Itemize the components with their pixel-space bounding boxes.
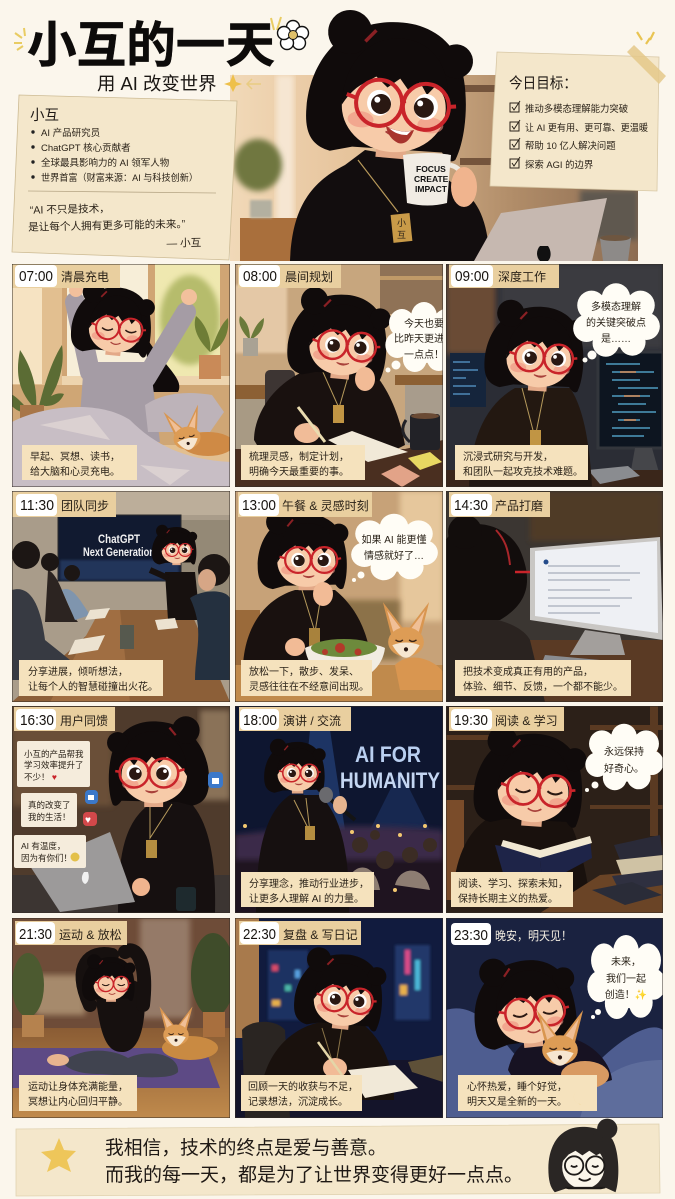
thought bubble [385,302,442,372]
feedback bubble 1: 小互的产品帮我 [24,749,84,759]
panel: 13:00 [235,491,443,702]
time label: 产品打磨 [495,499,543,513]
sketch portrait [548,1119,618,1192]
city lights [268,945,430,1020]
chair [265,370,295,404]
title: 小互的一天 [27,19,275,73]
feedback bubble 3 [14,835,86,868]
feedback bubble 2 [21,793,77,827]
feedback bubble 1: 不少！ ♥ [24,772,57,782]
caption: 分享理念，推动行业进步， [249,877,369,890]
icon: sparkle [224,74,261,92]
profile bullets [31,127,198,184]
panel: 19:30 [446,706,664,913]
table [235,665,443,702]
keyboard [588,466,640,484]
name badge: 互 [397,230,406,240]
caption: 明确今天最重要的事。 [249,465,349,478]
profile quote: 是让每个人拥有更多可能的未来。” [28,217,186,234]
thought bubble: 是…… [601,333,631,345]
monitor [530,537,663,655]
feedback bubble 3: 因为有你们！ [21,853,72,863]
caption [22,445,137,480]
book stack [592,835,663,905]
chair [242,1022,290,1118]
thought bubble [573,283,660,362]
time label: 07:00 [19,268,53,285]
books [408,1055,443,1082]
name badge: 小 [397,218,406,228]
time label [449,707,564,731]
fox cuddled [537,1010,609,1089]
bedding [446,1008,663,1118]
screen: ChatGPT [98,532,141,546]
character [468,950,612,1090]
time label [451,923,572,945]
hero illustration [230,7,638,261]
crowd [235,824,443,913]
character yoga [47,950,178,1077]
name badge [391,213,412,243]
coffee mug: FOCUS [416,164,446,174]
caption: 阅读、学习、探索未知， [458,877,568,890]
icon: title sparks [14,17,281,50]
caption [241,445,365,480]
icon: star [41,1138,76,1172]
closing message: 我相信，技术的终点是爱与善意。 [105,1137,387,1158]
thought bubble: 我们一起 [606,972,646,985]
feedback bubble 3: AI 有温度， [21,841,65,851]
goals checklist [510,101,649,170]
caption: 把技术变成真正有用的产品， [463,665,593,678]
panel: 07:00 [4,264,234,487]
feedback bubble 2: 真的改变了 [28,800,71,810]
stage title [340,742,440,793]
notebook [294,407,408,462]
mat [12,1048,220,1088]
thought bubble [585,724,664,792]
time label: 13:00 [242,497,276,514]
panel: profile card [12,95,237,260]
fox [383,602,443,690]
time label [238,264,341,288]
character [256,739,349,913]
character [452,724,590,900]
panel: 14:30 [446,491,663,702]
caption [458,1075,597,1111]
goals checklist: 推动多模态理解能力突破 [525,103,628,114]
icon: flower [278,20,308,50]
stage title: HUMANITY [340,768,440,793]
time label: 复盘 & 写日记 [283,927,358,942]
time label: 16:30 [20,712,54,729]
caption: 明天又是全新的一天。 [467,1095,567,1108]
time label: 09:00 [455,268,489,285]
sticky notes [381,452,442,487]
time label: 19:30 [454,712,488,729]
caption: 心怀热爱，睡个好觉， [467,1080,567,1093]
caption: 让每个人的智慧碰撞出火花。 [28,680,158,693]
panel: 18:00 [235,706,443,913]
goals checklist: 让 AI 更有用、更可靠、更温暖 [525,122,649,133]
profile bullets: 全球最具影响力的 AI 领军人物 [41,157,170,169]
thought bubble: 今天也要 [404,317,444,330]
bed [12,393,232,487]
caption: 和团队一起攻克技术难题。 [463,465,583,478]
left monitor [450,353,486,407]
salad bowl [305,639,385,672]
thought bubble: 情感就好了… [364,549,424,562]
time label: 21:30 [19,926,52,943]
time label [239,921,361,945]
time label [15,921,127,945]
plants [12,933,235,1037]
character [260,945,394,1100]
time label: 清晨充电 [61,269,109,284]
mug [176,887,196,911]
profile quote: “AI 不只是技术， [30,202,110,217]
time label: 18:00 [243,712,277,729]
thought bubble [351,514,438,582]
caption: 运动让身体充满能量， [28,1080,128,1093]
time label [12,492,116,517]
presenter [150,525,200,620]
tape and spark decoration [627,32,666,84]
panel: today's goals [490,52,659,191]
right monitor [598,352,663,476]
closing message: 而我的每一天，都是为了让世界变得更好一点点。 [105,1164,523,1186]
feedback bubble 2: 我的生活！ [28,812,71,822]
time label: 晨间规划 [285,269,333,284]
caption [19,660,163,696]
microphone [319,787,355,820]
desk [235,440,443,487]
time label [239,707,351,731]
time label: 22:30 [243,926,276,943]
caption [451,872,573,907]
profile quote [28,200,202,253]
character [107,716,215,913]
goals heading: 今日目标： [509,75,577,92]
thought bubble: 永远保持 [604,745,644,758]
caption: 冥想让内心回归平静。 [28,1095,128,1108]
time label: 晚安，明天见！ [495,928,572,943]
stage title: AI FOR [355,742,421,767]
coffee mug: IMPACT [415,184,448,194]
time label [14,707,115,731]
keyboard [540,655,600,675]
fox sleeping [163,405,234,456]
character [254,285,405,450]
caption: 体验、细节、反馈，一个都不能少。 [463,680,623,693]
character from behind [446,515,545,702]
feedback bubble 1: 学习效率提升了 [24,760,84,770]
time label: 运动 & 放松 [59,927,122,942]
thought bubble: 创造！✨ [605,988,647,1001]
caption [19,1075,137,1111]
time label: 团队同步 [61,498,109,513]
screen: Next Generation [83,545,155,559]
panel: 09:00 [446,264,663,487]
profile quote: — 小互 [166,237,202,250]
caption: 早起、冥想、读书， [30,450,120,463]
mug [403,413,440,450]
caption [241,1075,362,1111]
time label [449,492,550,517]
thought bubble [587,935,666,1019]
caption [241,660,372,696]
caption: 沉浸式研究与开发， [463,450,553,463]
time label: 演讲 / 交流 [283,713,341,728]
time label: 午餐 & 灵感时刻 [282,498,369,513]
fox [160,1006,218,1060]
plants [4,316,228,423]
screen [58,515,181,581]
thought bubble: 的关键突破点 [586,316,646,329]
caption: 回顾一天的收获与不足， [248,1080,358,1093]
icon: thumbs up [208,772,223,788]
open book [495,836,592,885]
time label: 用户同馈 [60,713,108,728]
caption: 记录想法，沉淀成长。 [248,1095,348,1108]
time label: 阅读 & 学习 [495,713,558,728]
time label: 23:30 [454,927,488,944]
profile bullets: AI 产品研究员 [41,127,100,139]
desk [235,1060,443,1118]
thought bubble: 如果 AI 能更懂 [361,533,427,546]
colleagues left [12,541,90,680]
laptop [30,832,150,912]
closing message [105,1137,523,1186]
character stretching [69,279,197,442]
laptop [474,198,607,261]
panel: 11:30 [12,491,230,702]
panel: closing banner [16,1119,660,1196]
caption [241,872,374,907]
subtitle: 用 AI 改变世界 [97,73,217,94]
icon: heart [83,812,97,826]
caption: 保持长期主义的热爱。 [458,892,558,905]
time label: 14:30 [454,497,488,514]
time label [238,492,372,517]
profile name: 小互 [30,107,59,124]
caption: 让更多人理解 AI 的力量。 [249,892,364,905]
notebook [348,1065,418,1098]
caption: 梳理灵感，制定计划， [249,450,349,463]
time label: 11:30 [20,497,54,514]
papers [68,608,178,655]
profile bullets: ChatGPT 核心贡献者 [41,142,131,154]
table [540,870,663,913]
colleague right [190,554,230,680]
panel: 16:30 [12,706,230,913]
panel: 08:00 [235,264,464,487]
character [243,517,368,660]
caption [455,660,631,696]
thought bubble: 比昨天更进步 [394,333,454,345]
caption: 分享进展，倾听想法， [28,665,128,678]
profile bullets: 世界首富（财富来源：AI 与科技创新） [41,172,198,184]
hero character [290,7,490,261]
caption: 放松一下，散步、发呆、 [249,665,359,678]
panel: 21:30 [12,918,235,1118]
goals checklist: 帮助 10 亿人解决问题 [525,140,616,151]
coffee mug: CREATE [414,174,449,184]
cup [600,235,631,261]
thought bubble: 好奇心。 [604,762,644,775]
coffee mug [403,153,477,207]
caption: 给大脑和心灵充电。 [30,465,120,478]
panel: 22:30 [235,918,443,1118]
thought bubble: 多模态理解 [591,300,641,313]
caption [455,445,588,480]
panel: 23:30 [446,918,666,1118]
goals checklist: 探索 AGI 的边界 [525,159,593,170]
time label [449,264,559,288]
caption: 灵感往往在不经意间出现。 [249,680,369,693]
thought bubble: 一点点！ [404,349,444,361]
thought bubble: 未来， [611,956,641,968]
character [469,298,592,487]
feedback bubble 1 [17,741,90,787]
time label: 08:00 [243,268,277,285]
plant [239,316,264,356]
icon: heart: ♥ [85,815,91,826]
time label [12,264,120,288]
table [12,610,230,702]
time label: 深度工作 [498,269,546,284]
icon: thumbs up small [85,790,98,804]
